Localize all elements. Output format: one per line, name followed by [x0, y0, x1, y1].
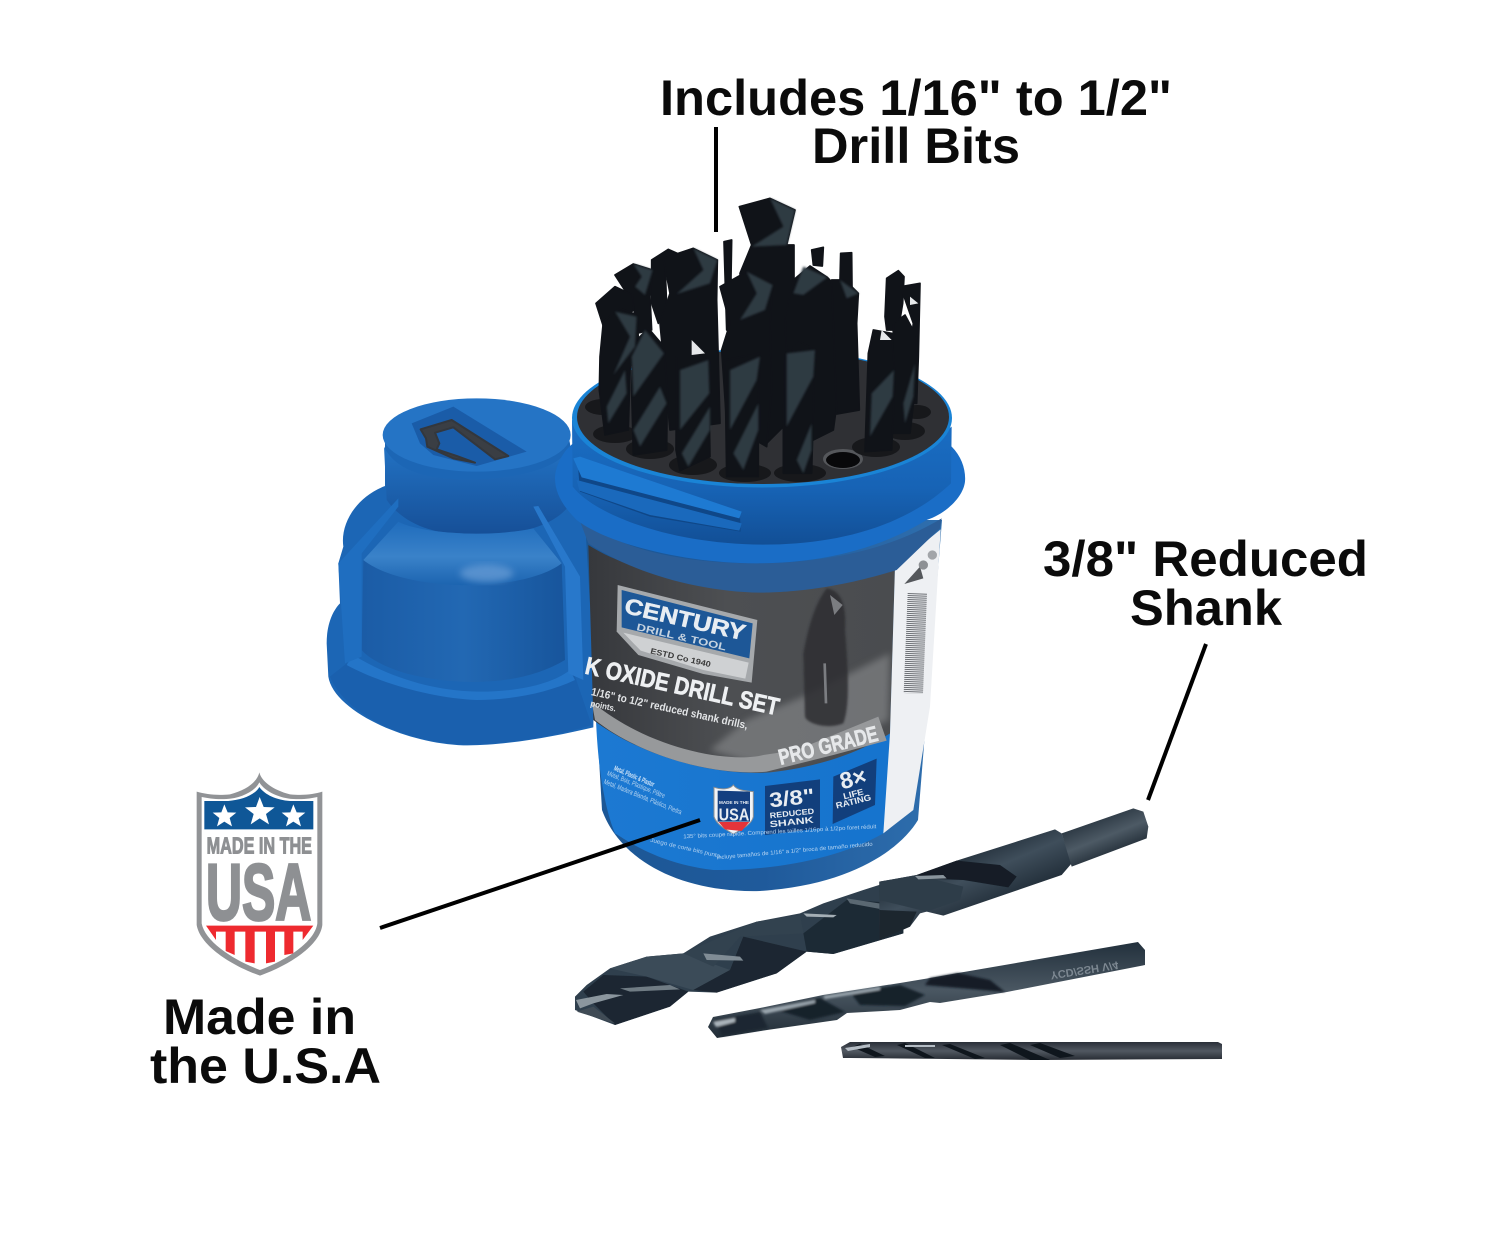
logo: CENTURY	[622, 593, 748, 645]
jar rim	[572, 348, 952, 488]
jar label: PRO GRADE	[776, 721, 881, 770]
heading: made in the USA	[150, 989, 381, 1094]
bit engraving: YCD/SSH V/4	[1050, 958, 1120, 981]
jar label: Metal, Plastic & Plaster	[613, 764, 656, 789]
heading: made in the USA: the U.S.A	[150, 1038, 381, 1094]
badge: 3/8 reduced shank	[765, 779, 820, 835]
title: drill bit sizes: Includes 1/16" to 1/2"	[660, 70, 1172, 126]
drill bits in jar	[596, 198, 920, 477]
jar label: points.	[590, 698, 617, 713]
jar label: 135° bits coupe rapide. Comprend les tailles 1/16po à 1/2po foret réduit	[683, 824, 877, 840]
logo: ESTD Co 1940	[650, 647, 712, 669]
icon: blue storage lid	[327, 398, 597, 745]
jar label	[583, 529, 941, 870]
badge: small made in USA: MADE IN THE	[719, 800, 749, 805]
lid slot	[421, 420, 508, 463]
arrow: sizes leader	[714, 127, 718, 232]
jar collar	[555, 420, 965, 593]
badge: 8x life rating: 8×	[837, 763, 869, 794]
jar label: K OXIDE DRILL SET	[583, 653, 782, 721]
jar	[555, 348, 965, 891]
heading: made in the USA: Made in	[163, 989, 356, 1045]
drill bit: small	[841, 1042, 1222, 1060]
badge: 3/8 reduced shank: 3/8"	[768, 785, 816, 812]
jar label: 1/16" to 1/2" reduced shank drills,	[590, 686, 749, 732]
title: drill bit sizes: Drill Bits	[812, 118, 1020, 174]
logo: DRILL & TOOL	[635, 622, 727, 654]
drill bit: medium	[708, 942, 1145, 1038]
arrow: shank leader	[1148, 644, 1206, 800]
jar label: Métal, Bois, Plastique, Plâtre	[606, 770, 666, 800]
heading: reduced shank	[1043, 531, 1368, 636]
arrow: USA leader	[380, 820, 700, 928]
heading: reduced shank: Shank	[1130, 580, 1282, 636]
drill holder plate	[577, 350, 949, 484]
icon: made in USA shield	[197, 772, 322, 976]
badge: 3/8 reduced shank: REDUCED	[769, 807, 815, 820]
icon: made in USA shield: MADE IN THE	[207, 832, 312, 858]
jar body	[585, 520, 942, 891]
drill bit: large	[575, 808, 1148, 1025]
badge: small made in USA	[714, 785, 753, 834]
logo	[617, 585, 757, 683]
heading: reduced shank: 3/8" Reduced	[1043, 531, 1368, 587]
jar label: Metal, Madera Blanda, Plástico, Piedra	[603, 779, 683, 816]
label: drill image	[803, 588, 848, 726]
bit highlights	[607, 198, 915, 473]
flute section	[575, 877, 903, 1025]
title: drill bit sizes	[660, 70, 1172, 174]
jar label: Juego de corte bits punta.	[650, 838, 723, 860]
badge: small made in USA: USA	[719, 804, 749, 824]
shank section	[879, 808, 1148, 940]
badge: 3/8 reduced shank: SHANK	[769, 815, 815, 829]
icon: made in USA shield: USA	[206, 847, 311, 936]
badge: 8x life rating	[833, 759, 877, 824]
badge: 8x life rating: RATING	[835, 792, 872, 811]
jar label: Incluye tamaños de 1/16" a 1/2" broca de tamaño reducido	[716, 842, 873, 861]
badge: 8x life rating: LIFE	[842, 787, 865, 801]
